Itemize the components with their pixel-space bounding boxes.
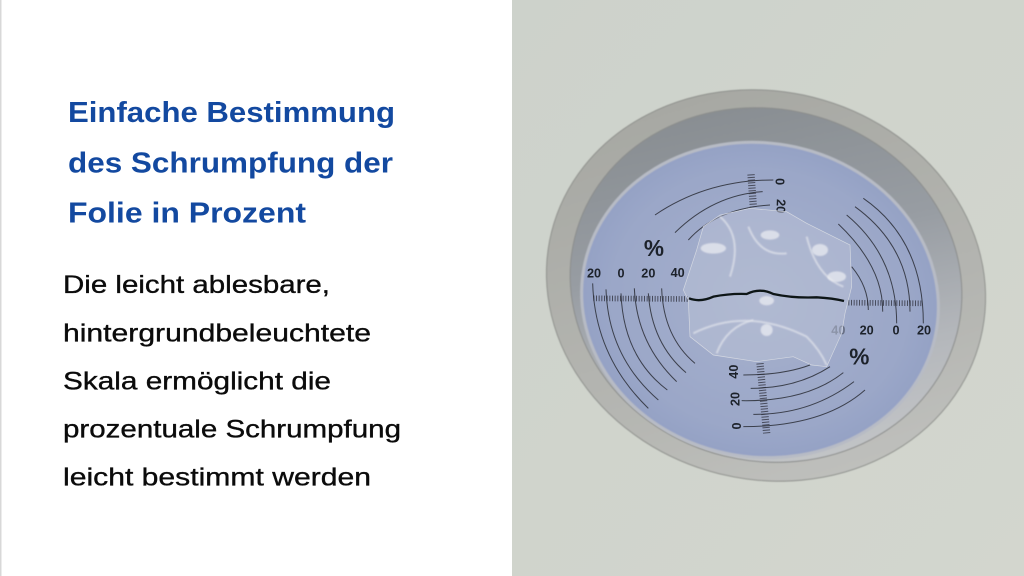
black shrink mark line: [689, 291, 844, 301]
body text: [63, 271, 401, 492]
percent signs: [644, 235, 869, 369]
foil bright spots: [701, 230, 846, 336]
foil highlights: [693, 217, 843, 365]
top numbers: [772, 178, 788, 213]
glass scale plate: [556, 114, 964, 486]
bottom numbers: 20: [729, 392, 743, 406]
title: [68, 97, 395, 230]
body text: leicht bestimmt werden: [63, 464, 371, 492]
top numbers: 20: [773, 199, 788, 213]
left numbers: [587, 178, 931, 430]
title: Einfache Bestimmung: [68, 97, 395, 129]
bottom numbers: 0: [730, 422, 744, 430]
right numbers: 20: [860, 323, 874, 337]
linear tick scales: [593, 174, 923, 433]
body text: Skala ermöglicht die: [63, 368, 331, 396]
percent signs: %: [849, 343, 869, 369]
metal rim: [505, 44, 1024, 527]
bottom numbers: 40: [727, 365, 741, 379]
panel: photo of shrink scale: [505, 0, 1024, 576]
right numbers: 0: [892, 323, 900, 337]
title: Folie in Prozent: [68, 198, 306, 230]
scale arcs: [593, 180, 923, 427]
body text: prozentuale Schrumpfung: [63, 416, 401, 444]
top numbers: 0: [772, 178, 786, 185]
right numbers: 20: [917, 323, 931, 337]
right numbers: [831, 323, 931, 337]
percent signs: %: [644, 235, 664, 261]
title: des Schrumpfung der: [68, 148, 393, 180]
inner wall: [532, 67, 1000, 503]
bottom numbers: [727, 365, 744, 430]
left numbers: 20: [587, 267, 601, 281]
left numbers: 40: [671, 266, 685, 280]
right numbers: 40: [831, 323, 845, 337]
body text: Die leicht ablesbare,: [63, 271, 330, 299]
left edge line: [0, 0, 2, 576]
left numbers: 20: [641, 267, 655, 281]
body text: hintergrundbeleuchtete: [63, 320, 371, 348]
left numbers: 0: [617, 267, 625, 281]
panel: text background: [0, 0, 512, 576]
scale markings: [587, 174, 931, 433]
shrunken foil: [683, 208, 852, 367]
